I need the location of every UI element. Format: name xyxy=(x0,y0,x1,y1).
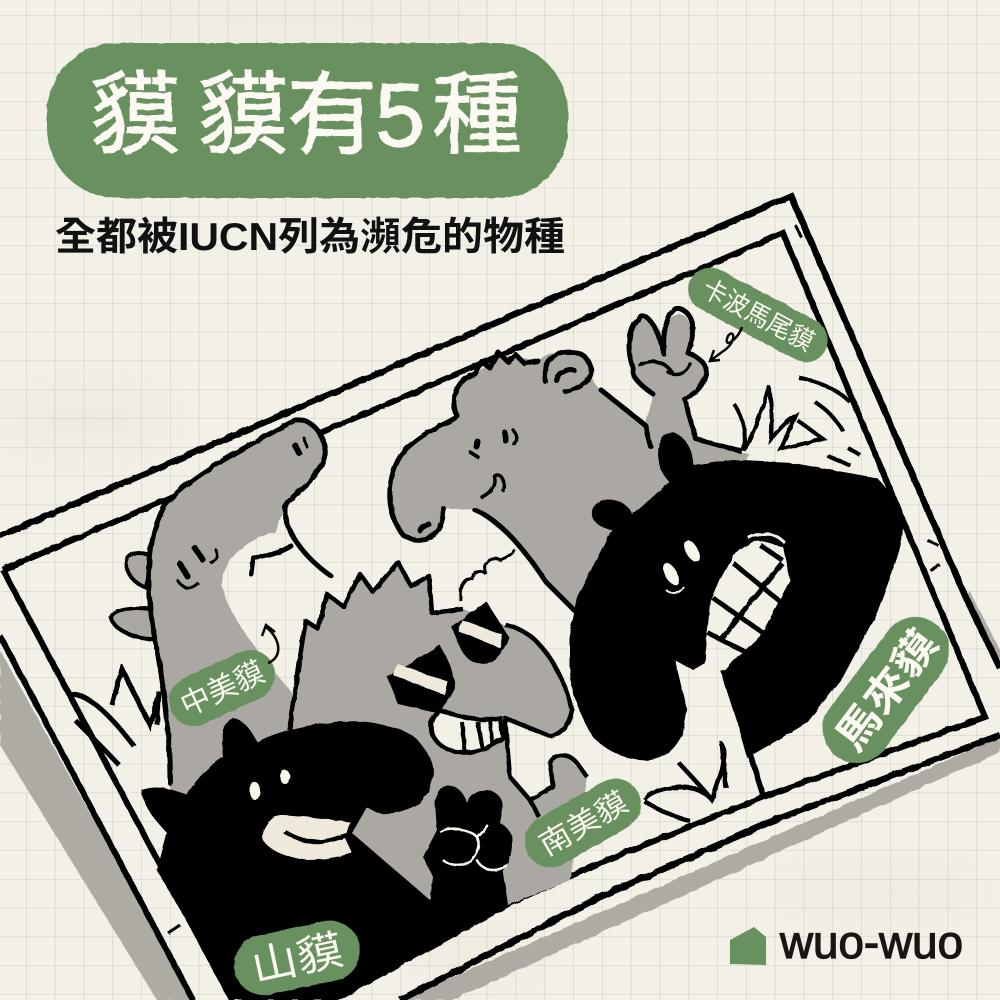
outline xyxy=(289,562,587,818)
subtitle: 全都被IUCN列為瀕危的物種 xyxy=(55,216,565,259)
eyes xyxy=(660,538,703,593)
scribble beside mane xyxy=(460,550,515,601)
right lens xyxy=(452,601,509,663)
label: Kabomani: 卡波馬尾貘 xyxy=(697,273,819,357)
ears xyxy=(588,429,700,535)
tapir: Malayan xyxy=(570,429,903,797)
label: Mountain: 山貘 xyxy=(247,926,347,991)
label: Malayan: 馬來貘 xyxy=(827,622,947,760)
tapir: South American xyxy=(289,562,587,905)
outline xyxy=(149,420,331,783)
tapir: Kabomani xyxy=(390,308,750,640)
arrow: to Kabomani xyxy=(710,327,742,361)
grass left xyxy=(71,669,159,765)
tapir: Mountain xyxy=(142,718,512,1000)
label: South American: 南美貘 xyxy=(534,786,634,863)
grass bottom xyxy=(645,745,726,821)
label: Mountain xyxy=(228,915,366,1000)
body xyxy=(149,420,325,800)
wordmark: wuo-wuo xyxy=(779,916,963,968)
label: South American xyxy=(515,769,651,877)
outline xyxy=(390,308,740,610)
photo shadow xyxy=(0,590,1000,1000)
tapir: Central American xyxy=(111,420,331,800)
left lens xyxy=(387,645,455,712)
body xyxy=(570,460,903,760)
peace hand highlight xyxy=(440,825,507,870)
body xyxy=(390,314,750,640)
ears xyxy=(111,552,156,639)
front leg line xyxy=(723,670,764,797)
face xyxy=(420,430,516,530)
title text: 貘貘有5種 xyxy=(90,66,522,166)
label: Malayan xyxy=(809,603,963,777)
label: Central American: 中美貘 xyxy=(176,656,269,723)
logo xyxy=(730,916,963,968)
teeth xyxy=(707,534,790,653)
arrow: to Central American xyxy=(262,625,278,663)
mouth and teeth xyxy=(431,710,503,753)
title pill xyxy=(47,43,568,198)
snout mouth xyxy=(262,815,352,860)
grass right xyxy=(734,378,860,465)
label: Kabomani xyxy=(681,260,835,370)
face xyxy=(178,438,307,588)
icon: house xyxy=(730,927,766,965)
label: Central American xyxy=(161,642,283,734)
eyes xyxy=(250,770,290,800)
body xyxy=(142,718,512,1000)
body xyxy=(289,562,587,905)
